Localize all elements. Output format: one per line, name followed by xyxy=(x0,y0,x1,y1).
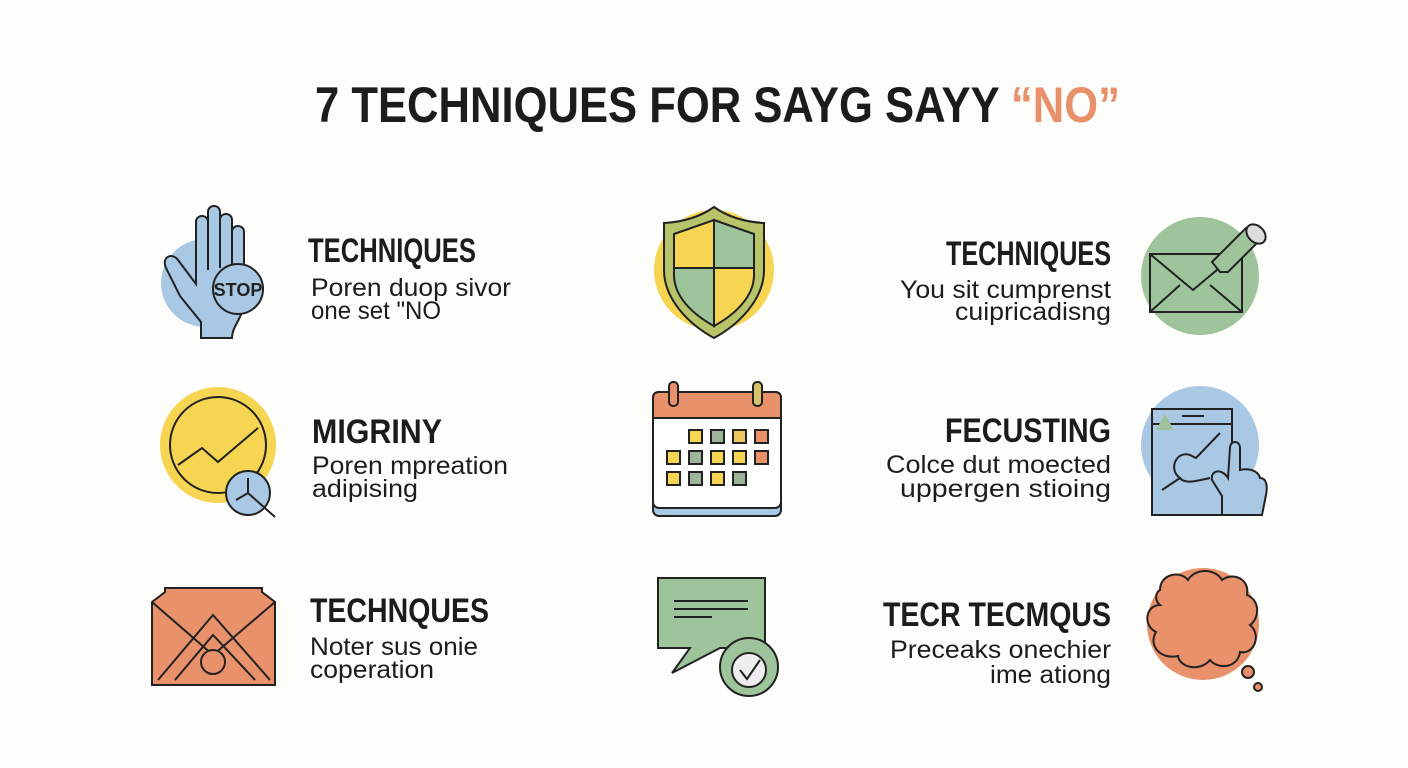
text: technique 1 xyxy=(308,232,511,325)
icon: tablet chart with hand xyxy=(1141,386,1267,515)
icon: stop hand: STOP xyxy=(214,280,262,300)
icon: thought cloud xyxy=(1147,568,1262,691)
text: technique 6 xyxy=(883,596,1111,689)
icon: green envelope with pen xyxy=(1141,217,1269,335)
title: 7 TECHNIQUES FOR SAYG SAYY “NO” xyxy=(315,77,1120,133)
icon: orange envelope xyxy=(152,588,275,685)
text: technique 5: Colce dut moected xyxy=(886,451,1111,479)
text: technique 4: cuipricadisng xyxy=(955,298,1111,326)
text: technique 1: Poren duop sivor xyxy=(311,274,511,302)
text: technique 2: Poren mpreation xyxy=(312,452,508,480)
text: technique 4: TECHNIQUES xyxy=(946,235,1111,273)
text: technique 6: ime ationg xyxy=(990,661,1111,689)
icon: yellow gauge xyxy=(160,387,276,517)
text: technique 3: TECHNQUES xyxy=(310,592,489,630)
text: technique 5 xyxy=(886,412,1111,503)
text: technique 6: TECR TECMQUS xyxy=(883,596,1111,634)
text: technique 3: Noter sus onie xyxy=(310,633,478,661)
text: technique 4 xyxy=(900,235,1111,326)
icon: stop hand xyxy=(161,206,263,338)
text: technique 4: You sit cumprenst xyxy=(900,276,1111,304)
text: technique 2: adipising xyxy=(312,475,418,503)
text: technique 2: MIGRINY xyxy=(312,413,442,451)
text: technique 5: FECUSTING xyxy=(945,412,1111,450)
text: technique 3 xyxy=(310,592,489,684)
icon: shield xyxy=(654,207,774,338)
text: technique 2 xyxy=(312,413,508,503)
icon: calendar xyxy=(653,382,781,516)
text: technique 6: Preceaks onechier xyxy=(890,636,1111,664)
icon: speech bubble with check xyxy=(658,578,778,696)
text: technique 1: one set "NO xyxy=(311,297,441,325)
text: technique 5: uppergen stioing xyxy=(900,475,1111,503)
text: technique 1: TECHNIQUES xyxy=(308,232,476,270)
text: technique 3: coperation xyxy=(310,656,434,684)
